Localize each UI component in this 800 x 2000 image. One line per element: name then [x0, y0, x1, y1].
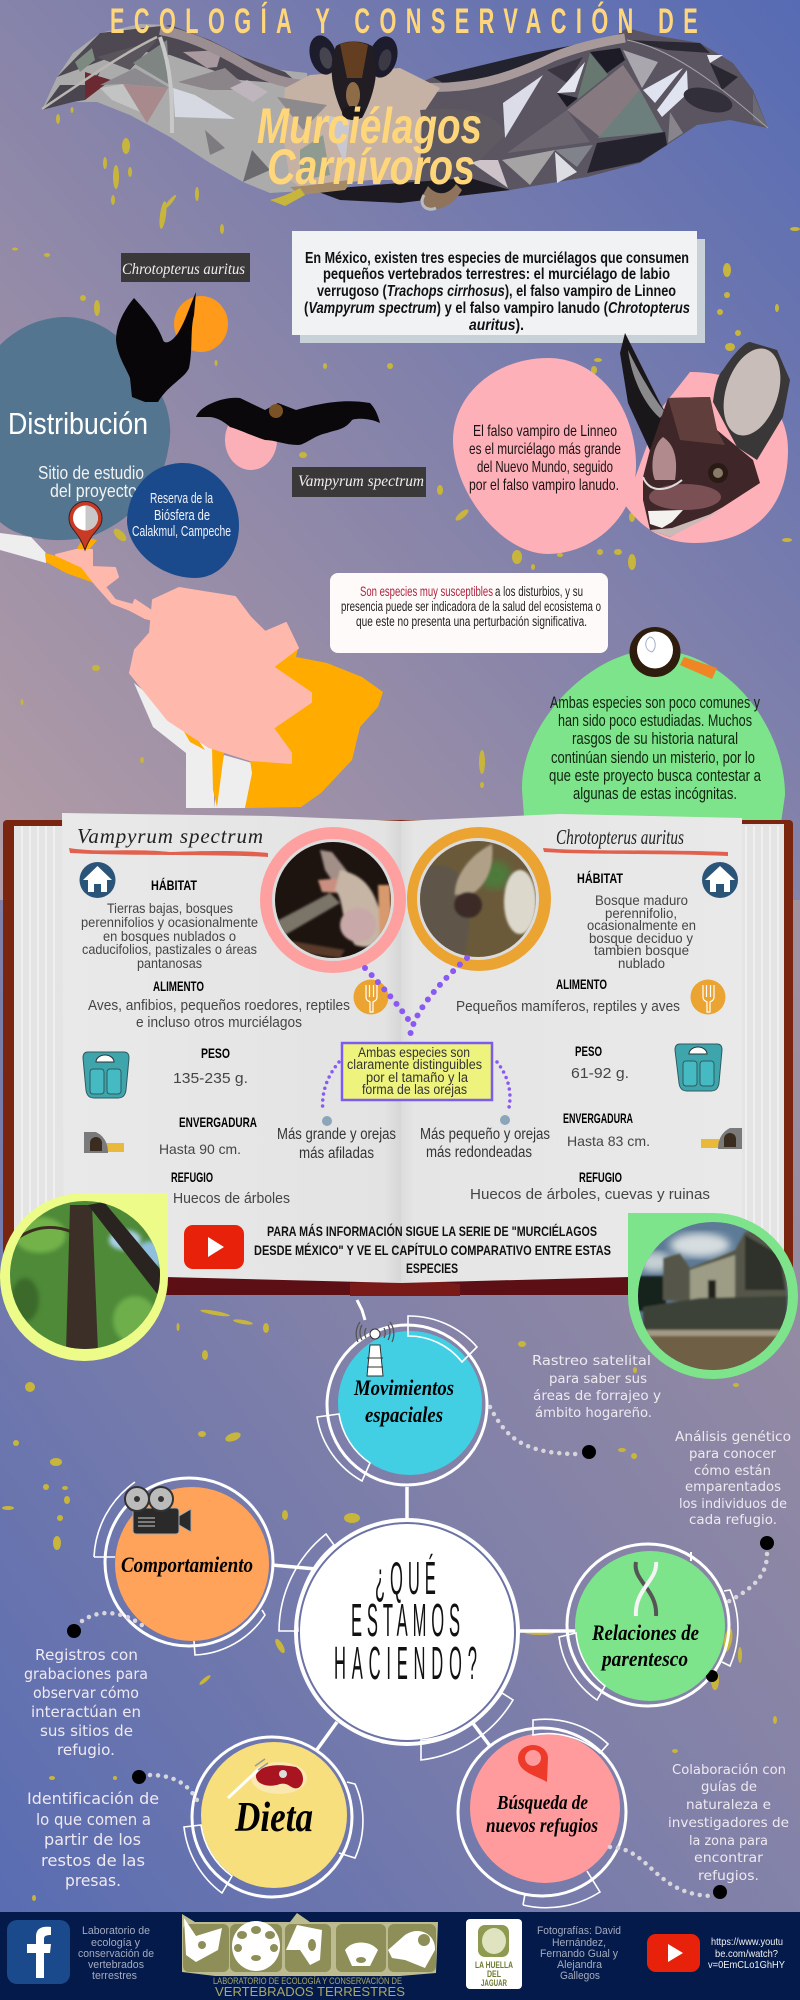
- blob: reserva de calakmul: Calakmul, Campeche: [132, 523, 231, 540]
- text: hábitat chrotopterus: bosque deciduo y: [589, 930, 693, 946]
- text: más información: DESDE MÉXICO" Y VE EL CAPÍTULO COMPARATIVO ENTRE ESTAS: [254, 1242, 611, 1258]
- footer text: fotografías: Hernández,: [552, 1937, 606, 1949]
- logo: la huella del jaguar: DEL: [487, 1969, 501, 1979]
- intro text box: pequeños vertebrados terrestres: el murciélago de labio: [323, 266, 670, 283]
- label: sitio de estudio: del proyecto: [50, 481, 137, 501]
- panel: dieta: [184, 1737, 363, 1897]
- text: envergadura chrotopterus: ENVERGADURA: [563, 1110, 633, 1126]
- connectors: dotted lines: [67, 1407, 774, 1899]
- footer text: fotografías: Fernando Gual y: [540, 1948, 618, 1960]
- blob: poco comunes: [522, 650, 785, 830]
- text: hábitat vampyrum: HÁBITAT: [151, 877, 197, 893]
- text: alimento vampyrum: [88, 978, 350, 1031]
- text: análisis genético: los individuos de: [679, 1496, 787, 1512]
- text: rastreo satelital: Rastreo satelital: [532, 1353, 651, 1369]
- label: sitio de estudio: [38, 463, 144, 501]
- text: hábitat vampyrum: pantanosas: [137, 955, 202, 971]
- title: murciélagos carnívoros: Murciélagos: [257, 98, 482, 154]
- callout: ambas especies: forma de las orejas: [362, 1082, 467, 1097]
- text: hábitat vampyrum: Tierras bajas, bosques: [107, 900, 233, 916]
- illustration: chrotopterus bat: [116, 292, 228, 402]
- footer text: fotografías: Fotografías: David: [537, 1925, 621, 1937]
- right wing: [400, 28, 768, 203]
- blob: reserva de calakmul: Biósfera de: [154, 507, 210, 524]
- text: más grande: Más grande y orejas: [277, 1126, 396, 1143]
- text: registros con grabaciones: [24, 1646, 148, 1759]
- panel: búsqueda de nuevos refugios: [458, 1719, 626, 1908]
- text: hábitat chrotopterus: HÁBITAT: [577, 870, 623, 886]
- label: vampyrum spectrum: [292, 467, 426, 497]
- text: alimento chrotopterus: [456, 976, 680, 1015]
- callout: especies susceptibles: presencia puede ser indicadora de la salud del ecosistema o: [341, 599, 601, 614]
- text: colaboración: [668, 1762, 789, 1884]
- panel: relaciones de parentesco: parentesco: [600, 1646, 688, 1671]
- spokes: [272, 1487, 577, 1751]
- blob: falso vampiro de linneo: por el falso vampiro lanudo.: [469, 477, 619, 494]
- icon: scale left: [83, 1052, 129, 1098]
- intro text box: verrugoso (Trachops cirrhosus), el falso vampiro de Linneo: [317, 283, 676, 300]
- text: hábitat chrotopterus: [577, 870, 696, 971]
- panel: comportamiento: Comportamiento: [121, 1552, 253, 1577]
- text: registros con grabaciones: refugio.: [57, 1741, 115, 1759]
- text: registros con grabaciones: sus sitios de: [40, 1722, 133, 1740]
- blob: falso vampiro de linneo: El falso vampiro de Linneo: [473, 423, 617, 440]
- footer text: laboratorio: Laboratorio de: [82, 1925, 150, 1937]
- logo: vertebrados terrestres: LABORATORIO DE ECOLOGÍA Y CONSERVACIÓN DE: [213, 1976, 402, 1986]
- footer text: youtube url: [708, 1936, 785, 1971]
- icon: youtube button: [184, 1225, 244, 1269]
- text: refugio vampyrum: Huecos de árboles: [173, 1190, 290, 1207]
- panel: comportamiento: [94, 1478, 273, 1655]
- text: registros con grabaciones: grabaciones para: [24, 1665, 148, 1683]
- icon: film camera: [125, 1487, 191, 1534]
- text: análisis genético: cómo están: [694, 1463, 771, 1479]
- text: rastreo satelital: ámbito hogareño.: [535, 1405, 652, 1421]
- intro text box: En México, existen tres especies de murciélagos que consumen: [305, 250, 689, 267]
- callout: ambas especies: [342, 1043, 492, 1100]
- text: refugio chrotopterus: [470, 1169, 710, 1203]
- text: más pequeño: más redondeadas: [426, 1144, 532, 1161]
- text: identificación: [27, 1789, 159, 1890]
- text: más grande: más afiladas: [299, 1145, 374, 1162]
- text: refugio vampyrum: [171, 1169, 290, 1207]
- text: colaboración: Colaboración con: [672, 1762, 786, 1778]
- icon: tape measure left: [84, 1132, 124, 1153]
- icon: facebook: [7, 1920, 70, 1984]
- label: sitio de estudio: Sitio de estudio: [38, 463, 144, 483]
- text: análisis genético: cada refugio.: [689, 1512, 777, 1528]
- icon: location pin: [69, 502, 102, 550]
- text: registros con grabaciones: interactúan en: [31, 1703, 141, 1721]
- text: rastreo satelital: áreas de forrajeo y: [533, 1388, 661, 1404]
- footer text: laboratorio: conservación de: [78, 1948, 154, 1960]
- map: latin america: [0, 533, 383, 808]
- callout: especies susceptibles: Son especies muy susceptibles: [360, 584, 493, 599]
- photo: chrotopterus auritus: [407, 827, 551, 971]
- text: hábitat vampyrum: [81, 877, 258, 971]
- panel: movimientos espaciales: Movimientos: [353, 1375, 454, 1400]
- text: rastreo satelital: para saber sus: [549, 1371, 647, 1387]
- circle: qué estamos haciendo: HACIENDO?: [334, 1639, 477, 1690]
- text: peso chrotopterus: 61-92 g.: [571, 1065, 629, 1082]
- illustration: bat head: [620, 333, 791, 537]
- footer text: youtube url: v=0EmCLo1GhHY: [708, 1959, 785, 1971]
- connector: dotted to comparison box: [322, 958, 510, 1126]
- text: más pequeño: Más pequeño y orejas: [420, 1126, 550, 1143]
- callout: especies susceptibles: que este no presenta una perturbación significativa.: [356, 614, 587, 629]
- text: más información: [254, 1222, 611, 1276]
- text: análisis genético: para conocer: [689, 1446, 776, 1462]
- text: análisis genético: Análisis genético: [675, 1429, 791, 1445]
- circle: qué estamos haciendo: [279, 1518, 520, 1760]
- icon: map pin: [518, 1745, 548, 1782]
- icon: scale right: [675, 1044, 722, 1091]
- footer text: fotografías: Alejandra: [557, 1959, 603, 1971]
- text: peso vampyrum: [173, 1045, 248, 1087]
- photo: ruins: [628, 1213, 798, 1379]
- footer text: youtube url: https://www.youtu: [711, 1936, 783, 1948]
- text: alimento vampyrum: ALIMENTO: [153, 978, 204, 994]
- icon: dna: [636, 1562, 656, 1616]
- text: envergadura vampyrum: Hasta 90 cm.: [159, 1141, 241, 1157]
- icon: magnifying glass: [630, 627, 717, 679]
- callout: especies susceptibles: [330, 573, 608, 653]
- footer text: fotografías: Gallegos: [560, 1970, 600, 1982]
- text: hábitat chrotopterus: Bosque maduro: [595, 892, 688, 908]
- label: chrotopterus auritus: [121, 253, 250, 282]
- callout: especies susceptibles: a los disturbios, y su: [495, 584, 583, 599]
- icon: fork right: [690, 980, 726, 1014]
- text: hábitat vampyrum: perennifolios y ocasionalmente: [81, 914, 258, 930]
- text: rastreo satelital: [532, 1353, 661, 1421]
- panel: relaciones de parentesco: [559, 1544, 738, 1706]
- text: identificación: Identificación de: [27, 1789, 159, 1808]
- intro text box: [292, 231, 705, 343]
- blob: falso vampiro de linneo: [453, 358, 788, 554]
- footer text: laboratorio: terrestres: [92, 1970, 137, 1982]
- callout: ambas especies: Ambas especies son: [358, 1045, 470, 1060]
- panel: relaciones de parentesco: Relaciones de: [591, 1620, 699, 1645]
- text: peso chrotopterus: PESO: [575, 1043, 602, 1059]
- text: alimento vampyrum: e incluso otros murciélagos: [136, 1014, 302, 1031]
- icon: house right: [702, 862, 738, 898]
- title: ecología y conservación: ECOLOGÍA Y CONSERVACIÓN DE: [110, 1, 698, 41]
- text: refugio vampyrum: REFUGIO: [171, 1169, 213, 1185]
- label: vampyrum spectrum: Vampyrum spectrum: [298, 473, 424, 490]
- label: chrotopterus auritus: Chrotopterus auritus: [122, 261, 245, 278]
- logo: vertebrados terrestres: [182, 1913, 438, 1999]
- text: envergadura chrotopterus: [563, 1110, 650, 1149]
- illustration: vampyrum bat: [196, 398, 380, 470]
- text: hábitat chrotopterus: tambien bosque: [594, 942, 689, 958]
- text: alimento chrotopterus: Pequeños mamíferos, reptiles y aves: [456, 998, 680, 1015]
- text: alimento chrotopterus: ALIMENTO: [556, 976, 607, 992]
- text: análisis genético: [675, 1429, 791, 1528]
- icon: meat and fork: [228, 1759, 307, 1798]
- logo: la huella del jaguar: LA HUELLA: [475, 1960, 513, 1970]
- text: hábitat vampyrum: en bosques nublados o: [103, 928, 236, 944]
- title: murciélagos carnívoros: [257, 98, 482, 195]
- panel: movimientos espaciales: espaciales: [365, 1402, 443, 1427]
- text: análisis genético: emparentados: [685, 1479, 781, 1495]
- intro text box: (Vampyrum spectrum) y el falso vampiro lanudo (Chrotopterus: [304, 300, 690, 317]
- footer text: laboratorio: vertebrados: [88, 1959, 144, 1971]
- callout: ambas especies: claramente distinguibles: [347, 1057, 482, 1072]
- text: hábitat chrotopterus: nublado: [618, 955, 665, 971]
- title: murciélagos carnívoros: Carnívoros: [267, 139, 475, 195]
- footer text: youtube url: be.com/watch?: [715, 1948, 778, 1960]
- text: hábitat vampyrum: caducifolios, pastizales o áreas: [82, 941, 257, 957]
- illustration: main bat: [42, 24, 768, 209]
- text: identificación: lo que comen a: [36, 1810, 151, 1829]
- text: registros con grabaciones: Registros con: [35, 1646, 138, 1664]
- heading: vampyrum spectrum: [69, 824, 268, 857]
- text: peso vampyrum: PESO: [201, 1045, 230, 1061]
- text: colaboración: encontrar: [694, 1850, 763, 1866]
- book: [3, 813, 793, 1296]
- logo: la huella del jaguar: JAGUAR: [481, 1978, 507, 1988]
- logo: la huella del jaguar: [466, 1919, 522, 1989]
- footer text: fotografías: [537, 1925, 621, 1982]
- blob: falso vampiro de linneo: es el murciélago más grande: [469, 441, 621, 458]
- text: colaboración: investigadores de: [668, 1815, 789, 1831]
- text: envergadura vampyrum: [159, 1114, 257, 1157]
- text: peso chrotopterus: [571, 1043, 629, 1082]
- blob: poco comunes: rasgos de su historia natural: [572, 729, 738, 748]
- circle: qué estamos haciendo: ¿QUÉ: [375, 1553, 436, 1605]
- icon: house left: [80, 862, 116, 898]
- icon: fork left: [354, 980, 388, 1014]
- icon: antenna: [356, 1300, 394, 1376]
- icon: tape measure right: [701, 1128, 742, 1149]
- text: envergadura vampyrum: ENVERGADURA: [179, 1114, 257, 1130]
- text: más grande: [277, 1126, 396, 1162]
- text: identificación: presas.: [65, 1871, 121, 1890]
- panel: búsqueda de nuevos refugios: nuevos refugios: [486, 1815, 598, 1837]
- icon: youtube footer: [647, 1934, 700, 1972]
- text: colaboración: guías de: [701, 1779, 757, 1795]
- left wing: [42, 24, 320, 193]
- logo: vertebrados terrestres: VERTEBRADOS TERRESTRES: [215, 1984, 405, 1999]
- footer band: [0, 1912, 800, 2000]
- photo: vampyrum spectrum: [260, 827, 406, 973]
- panel: movimientos espaciales: [317, 1316, 487, 1485]
- text: identificación: restos de las: [41, 1851, 145, 1870]
- blob: distribución: [0, 317, 170, 540]
- blob: reserva de calakmul: Reserva de la: [150, 490, 213, 507]
- blob: reserva de calakmul: [127, 463, 239, 578]
- blob: falso vampiro de linneo: del Nuevo Mundo, seguido: [477, 459, 613, 476]
- panel: dieta: Dieta: [234, 1795, 313, 1841]
- heading: distribución: Distribución: [8, 406, 148, 441]
- text: más información: PARA MÁS INFORMACIÓN SIGUE LA SERIE DE "MURCIÉLAGOS: [267, 1222, 597, 1239]
- text: colaboración: refugios.: [698, 1868, 759, 1884]
- photo: forest: [0, 1193, 168, 1361]
- claws: [270, 184, 462, 209]
- panel: búsqueda de nuevos refugios: Búsqueda de: [496, 1792, 588, 1814]
- circle: qué estamos haciendo: ESTAMOS: [351, 1596, 460, 1647]
- heading: chrotopterus auritus: Chrotopterus auritus: [556, 825, 684, 849]
- text: registros con grabaciones: observar cómo: [33, 1684, 139, 1702]
- text: envergadura chrotopterus: Hasta 83 cm.: [567, 1133, 650, 1149]
- text: identificación: partir de los: [44, 1830, 141, 1849]
- text: alimento vampyrum: Aves, anfibios, pequeños roedores, reptiles: [88, 997, 350, 1014]
- footer text: laboratorio: ecología y: [91, 1937, 140, 1949]
- callout: ambas especies: por el tamaño y la: [366, 1070, 468, 1085]
- text: peso vampyrum: 135-235 g.: [173, 1070, 248, 1087]
- body: [282, 68, 440, 187]
- text: colaboración: naturaleza e: [686, 1797, 771, 1813]
- text: refugio chrotopterus: REFUGIO: [579, 1169, 622, 1185]
- text: más pequeño: [420, 1126, 550, 1161]
- head: [305, 32, 402, 120]
- intro text box: auritus).: [469, 317, 524, 334]
- blob: poco comunes: algunas de estas incógnitas.: [573, 784, 737, 803]
- text: hábitat chrotopterus: ocasionalmente en: [587, 917, 696, 933]
- footer text: laboratorio: [78, 1925, 154, 1982]
- text: colaboración: la zona para: [689, 1833, 768, 1849]
- heading: vampyrum spectrum: Vampyrum spectrum: [77, 824, 263, 848]
- text: más información: ESPECIES: [406, 1260, 458, 1276]
- text: refugio chrotopterus: Huecos de árboles, cuevas y ruinas: [470, 1186, 710, 1203]
- text: hábitat chrotopterus: perennifolio,: [605, 905, 677, 921]
